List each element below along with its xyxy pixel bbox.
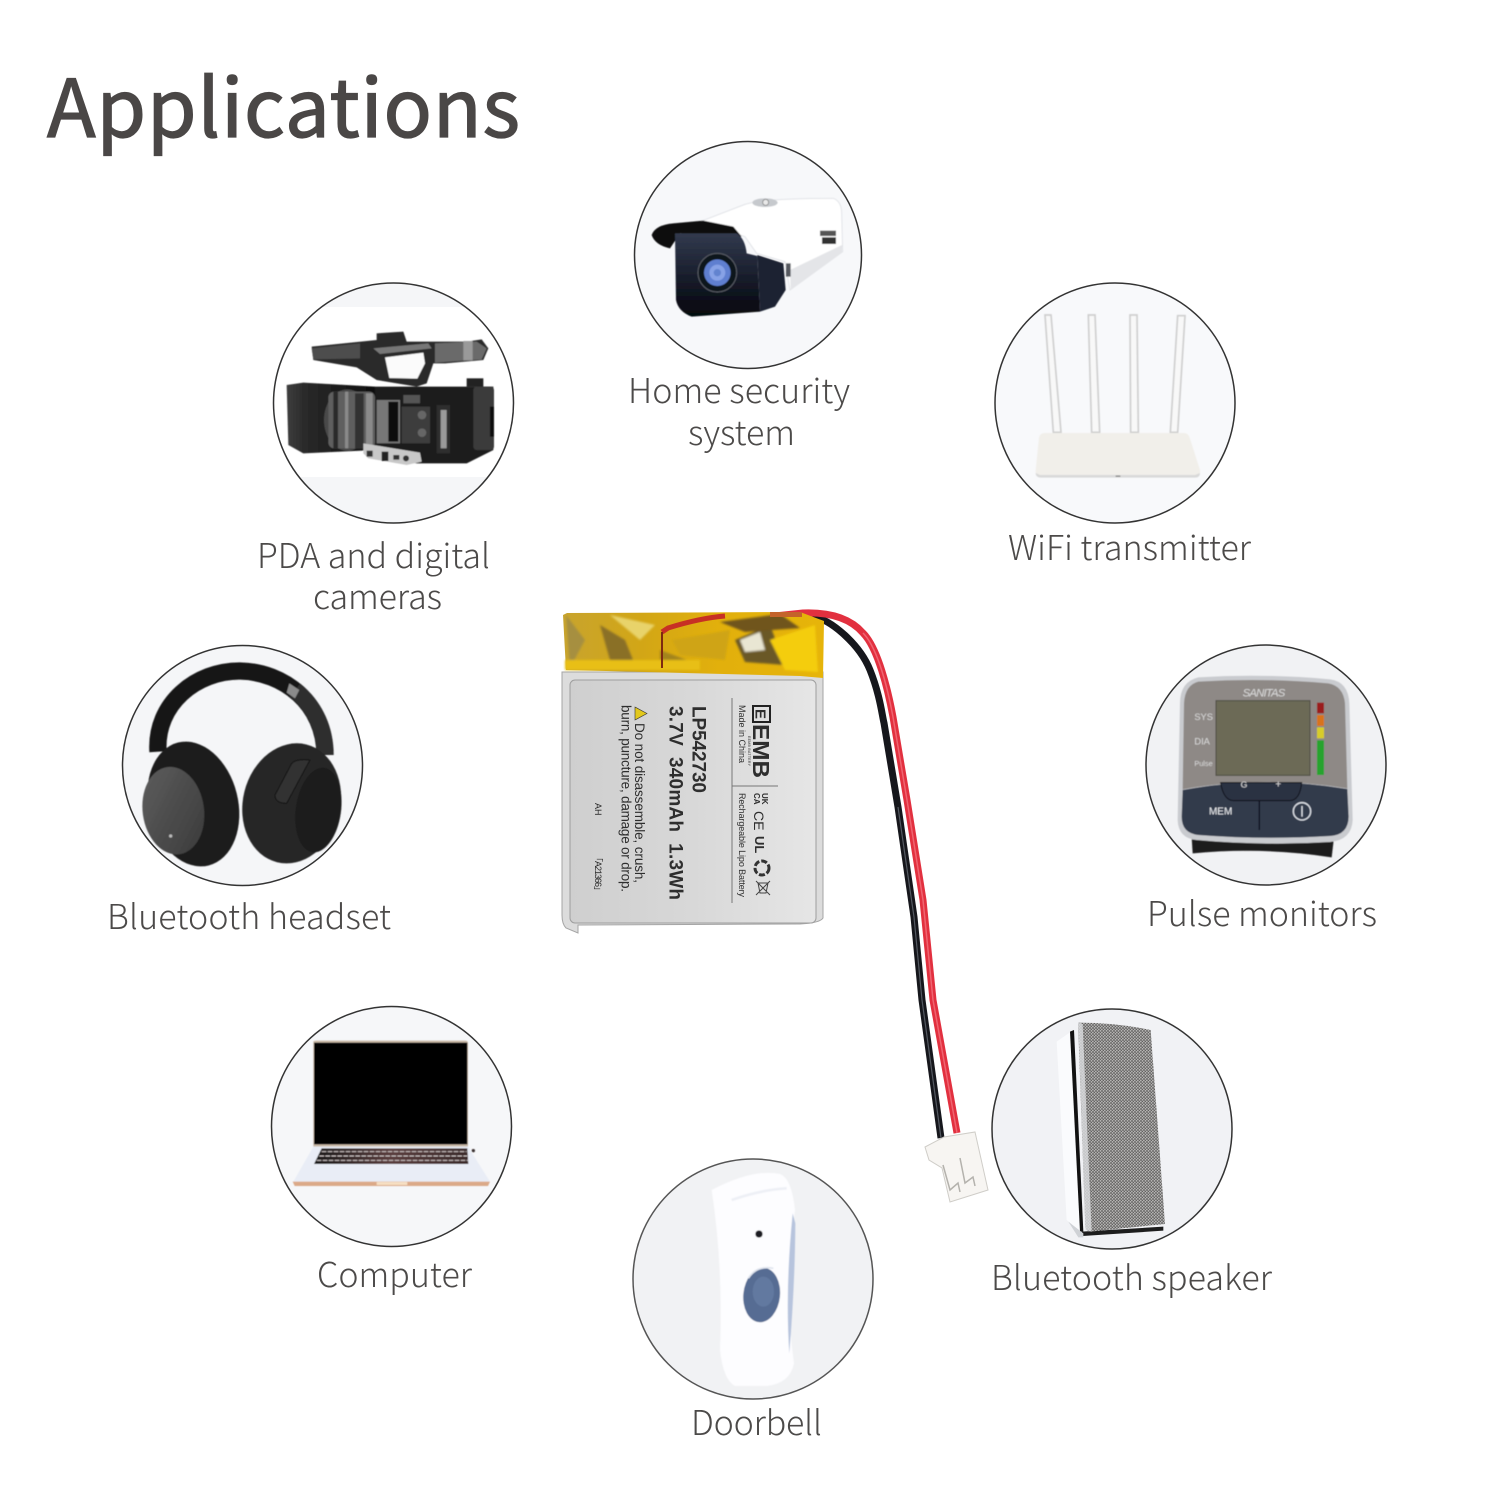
battery: certification marks <box>751 793 770 895</box>
title: Applications <box>47 45 520 161</box>
circle: WiFi transmitter <box>995 283 1235 523</box>
icon: wrist blood pressure monitor <box>1178 676 1353 857</box>
icon: wrist blood pressure monitor: + <box>1275 779 1281 790</box>
icon: wrist blood pressure monitor: DIA <box>1194 737 1211 747</box>
label: Bluetooth speaker: Bluetooth speaker <box>991 1251 1273 1300</box>
label: PDA and digital cameras <box>257 529 490 619</box>
icon: wrist blood pressure monitor: Pulse <box>1194 759 1213 768</box>
label: Doorbell: Doorbell <box>691 1396 822 1445</box>
icon: wrist blood pressure monitor: MEM <box>1209 807 1232 818</box>
battery: metal body <box>562 672 823 933</box>
battery: printed text <box>593 705 747 900</box>
battery: certification marks: CE <box>751 811 767 830</box>
panel: WiFi transmitter <box>995 283 1252 570</box>
circle: Doorbell <box>633 1159 873 1399</box>
battery: printed text: Do not disassemble, crush, <box>632 723 647 883</box>
label: Pulse monitors: Pulse monitors <box>1147 887 1377 936</box>
battery: certification marks: CA <box>752 793 761 805</box>
icon: doorbell button <box>712 1173 795 1386</box>
photo backdrop: camcorder <box>274 307 514 477</box>
battery: yellow kapton tape band <box>563 612 824 678</box>
connector: white JST plug <box>925 1132 988 1202</box>
icon: bullet security camera <box>652 198 843 317</box>
battery: silver label <box>570 680 816 923</box>
circle: home security <box>634 142 862 368</box>
panel: Computer <box>272 1006 512 1297</box>
icon: wrist blood pressure monitor: SANITAS <box>1243 688 1286 700</box>
battery: logo: EEMB BATTERY <box>747 736 751 767</box>
icon: WiFi router <box>1036 315 1200 478</box>
battery: printed text: 「A21366」 <box>593 853 603 895</box>
wire: red lead <box>775 613 957 1133</box>
circle: Pulse monitors <box>1146 645 1386 885</box>
battery: certification marks: UL <box>752 836 767 853</box>
label: Computer: Computer <box>317 1248 473 1297</box>
battery: logo: EMB <box>748 724 774 778</box>
circle: Bluetooth headset <box>122 646 362 886</box>
label: PDA and digital cameras: PDA and digital <box>257 529 490 578</box>
battery: label dividers <box>732 698 778 903</box>
icon: laptop <box>293 1041 490 1186</box>
panel: Bluetooth speaker <box>991 1009 1273 1300</box>
label: home security system: system <box>688 406 795 455</box>
circle: digital cameras <box>274 283 514 523</box>
battery: printed text: Made in China <box>737 705 747 763</box>
icon: wrist blood pressure monitor: SYS <box>1194 712 1213 722</box>
panel: Bluetooth headset <box>107 646 391 939</box>
icon: over-ear headphones <box>135 671 354 876</box>
label: WiFi transmitter: WiFi transmitter <box>1008 521 1252 570</box>
label: home security system: Home security <box>628 364 850 413</box>
battery: printed text: Rechargeable Lipo Battery <box>737 793 747 898</box>
icon: tower speaker <box>1057 1023 1165 1237</box>
battery: certification marks: UK <box>760 793 769 805</box>
panel: PDA and digital cameras <box>257 283 514 619</box>
panel: Pulse monitors <box>1146 645 1386 936</box>
label: Bluetooth headset: Bluetooth headset <box>107 890 391 939</box>
battery: printed text: AH <box>593 803 603 816</box>
battery: warning triangle <box>635 707 647 720</box>
battery: logo: E <box>752 709 768 719</box>
circle: Computer <box>272 1006 512 1246</box>
panel: home security system <box>628 142 862 455</box>
battery: printed text: burn, puncture, damage or drop. <box>619 705 634 892</box>
label: PDA and digital cameras: cameras <box>313 570 442 619</box>
circle: Bluetooth speaker <box>992 1009 1232 1249</box>
wire: black lead <box>812 616 941 1138</box>
panel: Doorbell <box>633 1159 873 1445</box>
battery: logo <box>747 706 774 778</box>
battery: printed text: LP542730 <box>688 706 709 793</box>
label: home security system <box>628 364 850 455</box>
battery with wires and connector <box>562 612 988 1202</box>
icon: wrist blood pressure monitor: G <box>1241 779 1248 789</box>
icon: video camcorder <box>287 332 494 465</box>
battery: printed text: 3.7V 340mAh 1.3Wh <box>664 706 686 900</box>
